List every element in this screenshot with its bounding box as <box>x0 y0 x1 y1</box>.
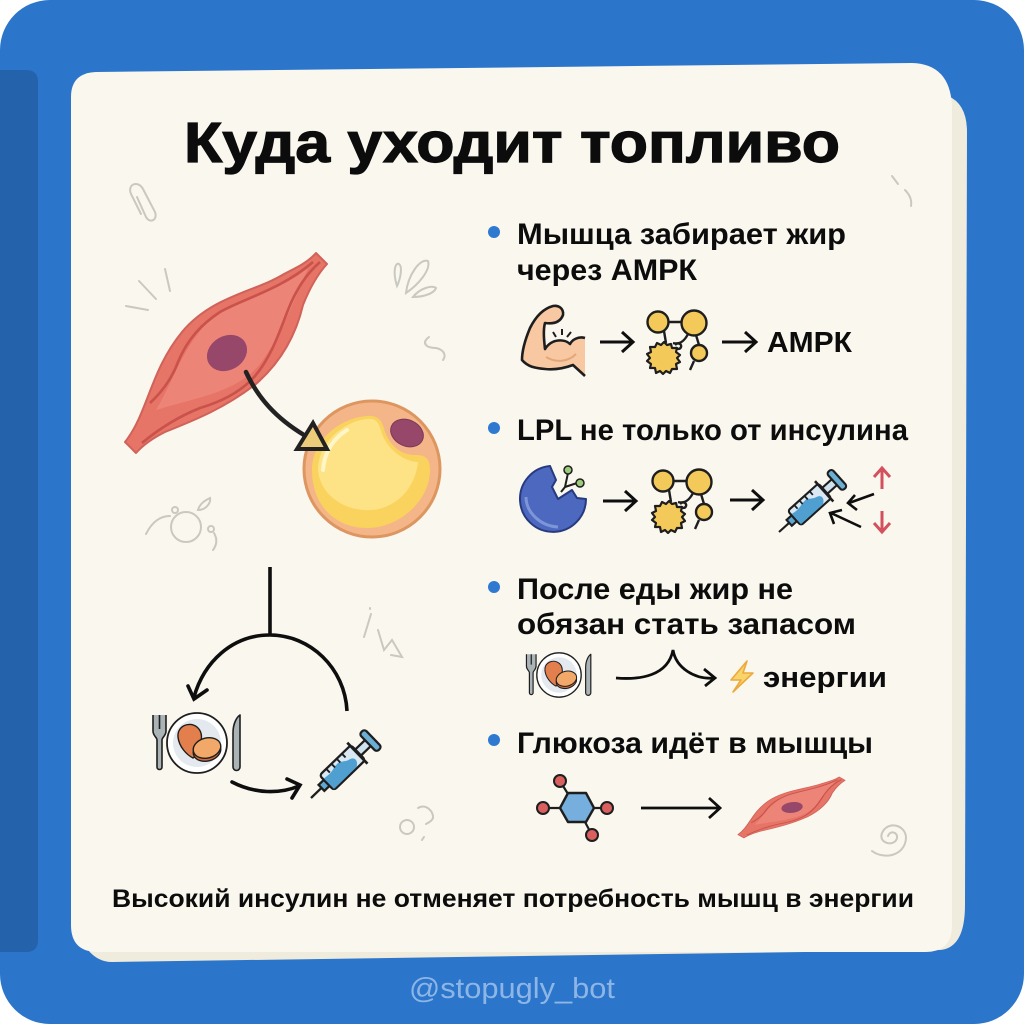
bullet: glucose: Глюкоза идёт в мышцы <box>517 727 873 760</box>
icon: plate with food <box>526 653 591 697</box>
icon: syringe <box>301 728 383 808</box>
small arrows to syringe <box>830 494 874 527</box>
arrow <box>600 332 633 352</box>
icon: molecule cluster <box>652 470 712 533</box>
arrow <box>730 490 763 510</box>
bullet: after meal <box>488 573 856 641</box>
cycle arrows <box>188 567 347 798</box>
icon: small muscle fiber <box>738 777 845 838</box>
decorative doodles <box>126 176 911 856</box>
icon: muscle fiber <box>125 253 327 453</box>
bullet: muscle takes fat: Мышца забирает жир <box>517 218 846 251</box>
icon: fat cell <box>304 401 440 537</box>
title: Куда уходит топливо <box>184 111 840 175</box>
bullet: muscle takes fat <box>488 218 846 287</box>
icon: molecule cluster <box>647 310 707 374</box>
icon: lightning <box>731 661 753 692</box>
icon: flexed biceps <box>522 306 585 376</box>
branching arrow <box>616 650 715 686</box>
label AMPK: АМРК <box>767 327 852 359</box>
arrow <box>722 332 756 352</box>
red arrows up and down <box>874 468 890 532</box>
watermark: @stopugly_bot <box>409 973 615 1005</box>
footer statement: Высокий инсулин не отменяет потребность мышц в энергии <box>112 885 914 913</box>
back paper sheet <box>88 96 967 962</box>
icon: plate with food <box>153 713 240 773</box>
arrow: muscle to fat cell <box>246 372 327 449</box>
front paper card <box>71 63 952 952</box>
arrow <box>641 798 720 818</box>
bullet: after meal: После еды жир не <box>517 573 793 606</box>
icon: syringe <box>770 467 849 542</box>
bullet: muscle takes fat: через АМРК <box>517 254 698 287</box>
left dark side band <box>0 70 38 952</box>
bullet: LPL: LPL не только от инсулина <box>517 414 908 447</box>
arrow <box>603 491 636 511</box>
icon: LPL enzyme <box>520 466 586 532</box>
icon: glucose molecule <box>537 775 613 841</box>
label energy: энергии <box>763 662 887 694</box>
bullet: after meal: обязан стать запасом <box>517 608 856 641</box>
